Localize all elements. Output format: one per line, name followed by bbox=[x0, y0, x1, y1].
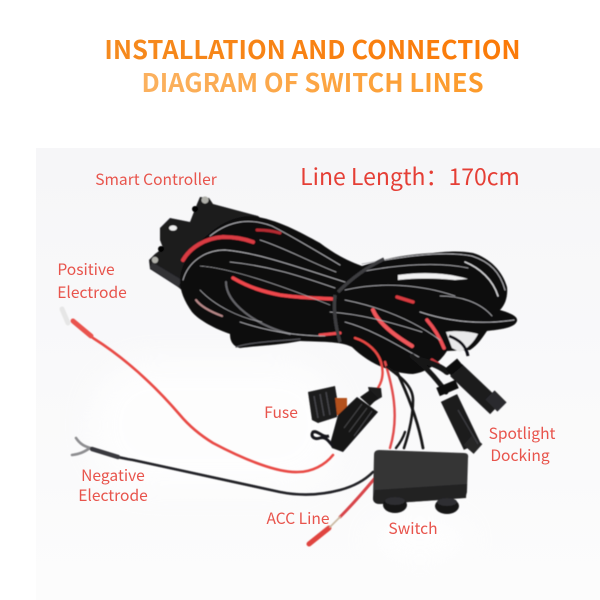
cable highlights bbox=[183, 221, 514, 362]
label: line length: Line Length：170cm bbox=[300, 158, 520, 192]
cable bundle mass bbox=[180, 216, 517, 374]
label: fuse: Fuse bbox=[264, 401, 298, 423]
label: spotlight docking: Spotlight bbox=[489, 422, 556, 444]
positive electrode red wire bbox=[62, 309, 383, 472]
title: DIAGRAM OF SWITCH LINES bbox=[141, 63, 484, 100]
switch feed wires bbox=[385, 356, 447, 448]
title: INSTALLATION AND CONNECTION bbox=[104, 30, 521, 67]
fuse holder bbox=[308, 386, 382, 452]
label: switch: Switch bbox=[388, 517, 438, 539]
product photo: wiring harness bbox=[62, 196, 517, 544]
label: positive electrode: Electrode bbox=[57, 281, 127, 303]
label: smart controller: Smart Controller bbox=[95, 168, 218, 190]
label: negative electrode: Negative bbox=[81, 464, 145, 486]
switch box bbox=[373, 450, 468, 514]
title bbox=[104, 30, 521, 100]
label: positive electrode: Positive bbox=[57, 258, 115, 280]
smart controller box bbox=[149, 196, 300, 330]
negative electrode black wire bbox=[72, 438, 373, 495]
red wires in bundle bbox=[183, 230, 444, 364]
label: spotlight docking: Docking bbox=[490, 444, 550, 466]
acc red wire bbox=[309, 478, 375, 544]
label: acc line: ACC Line bbox=[266, 507, 330, 529]
zip ties bbox=[334, 259, 384, 342]
spotlight docking connectors bbox=[438, 362, 502, 449]
photo background bbox=[36, 148, 600, 600]
label: negative electrode: Electrode bbox=[78, 484, 148, 506]
